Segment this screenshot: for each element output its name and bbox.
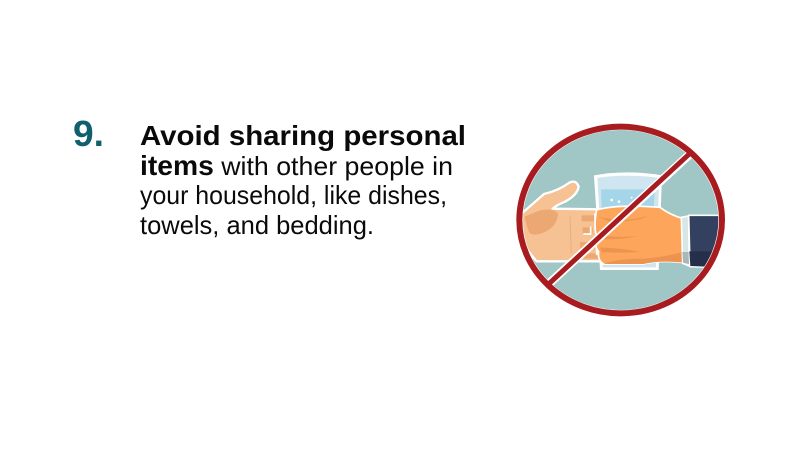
icon: no sharing of a glass between hands xyxy=(519,127,723,313)
icon: gripping hand on right xyxy=(595,206,683,264)
prohibition slash backing xyxy=(550,155,689,283)
icon: shirt cuff and suit sleeve xyxy=(681,215,723,267)
instruction text: Avoid sharing personal xyxy=(140,120,466,151)
prohibition ring xyxy=(519,127,722,313)
instruction text: towels, and bedding. xyxy=(140,210,374,240)
step number: 9. xyxy=(73,113,104,154)
instruction text: items with other people in xyxy=(140,150,453,181)
instruction text xyxy=(140,120,466,240)
icon: open hand on left xyxy=(520,182,600,261)
icon: water glass xyxy=(594,172,662,270)
hands and glass clipped to disc xyxy=(520,172,723,270)
prohibition slash xyxy=(549,153,691,284)
teal disc xyxy=(522,129,719,311)
instruction text: your household, like dishes, xyxy=(140,180,447,210)
white inner ring xyxy=(522,129,720,311)
